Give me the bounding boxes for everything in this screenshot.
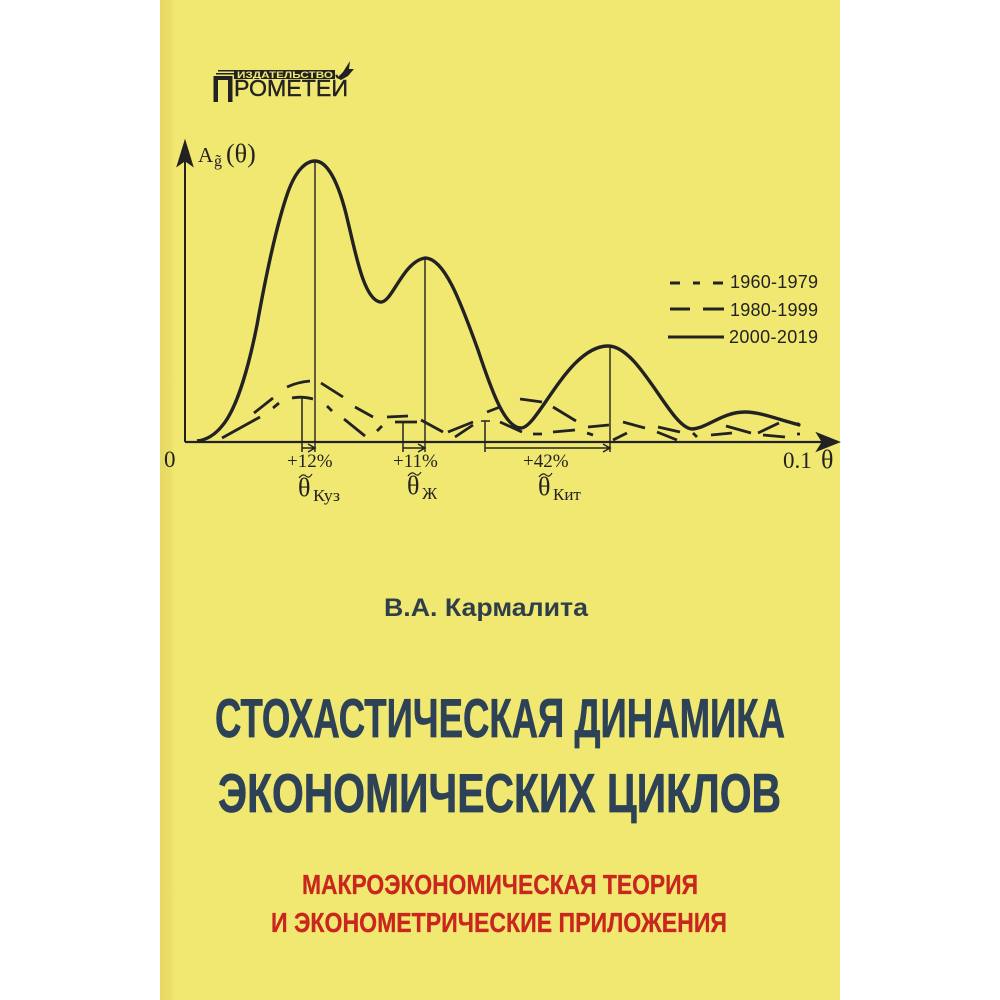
y axis label: A [198,143,214,167]
shift label 12 percent: +12% [287,451,333,472]
author: В.А. Кармалита [384,594,589,622]
subtitle: МАКРОЭКОНОМИЧЕСКАЯ ТЕОРИЯ [302,869,698,900]
y axis with arrow [178,142,192,442]
panel: book cover [160,0,840,1000]
theta label Kit: Кит [553,485,581,504]
publisher logo: ИЗДАТЕЛЬСТВО [237,70,333,80]
subtitle: И ЭКОНОМЕТРИЧЕСКИЕ ПРИЛОЖЕНИЯ [271,907,727,938]
legend 2000-2019: 2000-2019 [729,327,818,347]
peak marker lines [315,161,610,452]
shift label 42 percent: +42% [523,451,569,472]
legend [668,272,818,347]
theta label Kuz [298,473,340,505]
shift markers [302,397,610,452]
curve 1960-1979 [222,397,800,440]
title [215,687,785,824]
x axis theta label: θ [821,445,833,474]
theta label Kit: θ [538,472,550,501]
legend 1980-1999: 1980-1999 [730,300,818,320]
chart: spectral curves [164,139,838,505]
curve 2000-2019 [197,161,800,441]
y axis label: (θ) [226,139,256,168]
x axis end label: 0.1 [783,448,812,473]
y axis label [198,139,256,170]
theta label Zh: θ [407,471,419,500]
title: ЭКОНОМИЧЕСКИХ ЦИКЛОВ [218,762,781,824]
theta label Zh: Ж [422,484,438,503]
legend 1960-1979: 1960-1979 [730,272,818,292]
theta label Kit [538,472,581,504]
theta label Zh [407,471,438,503]
x axis with arrow [185,434,838,450]
y axis label: g̃ [214,153,222,170]
publisher logo [214,61,354,102]
publisher logo: РОМЕТЕЙ [234,74,348,101]
curve 1980-1999 [254,381,800,437]
theta label Kuz: Куз [313,486,340,505]
origin label: 0 [164,447,176,472]
shift label 11 percent: +11% [393,451,438,472]
theta label Kuz: θ [298,473,310,502]
subtitle [271,869,727,938]
